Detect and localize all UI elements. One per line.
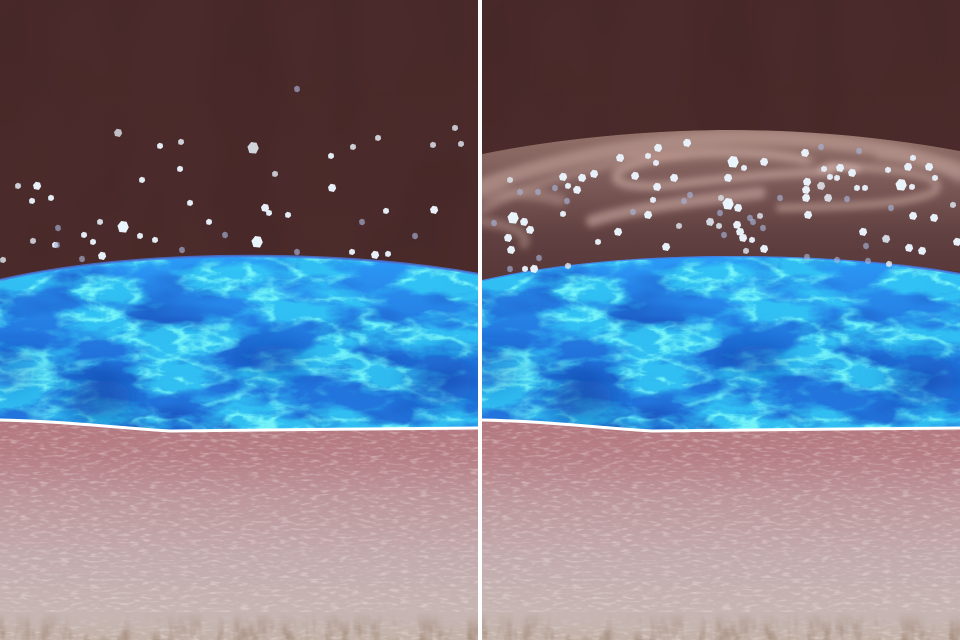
shroud: swirling layer above the dome [482, 130, 960, 280]
particles: left panel [0, 86, 464, 263]
particles: right panel [491, 139, 960, 273]
panel: left, without shroud [0, 0, 478, 640]
panel: right, with shroud [482, 0, 960, 640]
